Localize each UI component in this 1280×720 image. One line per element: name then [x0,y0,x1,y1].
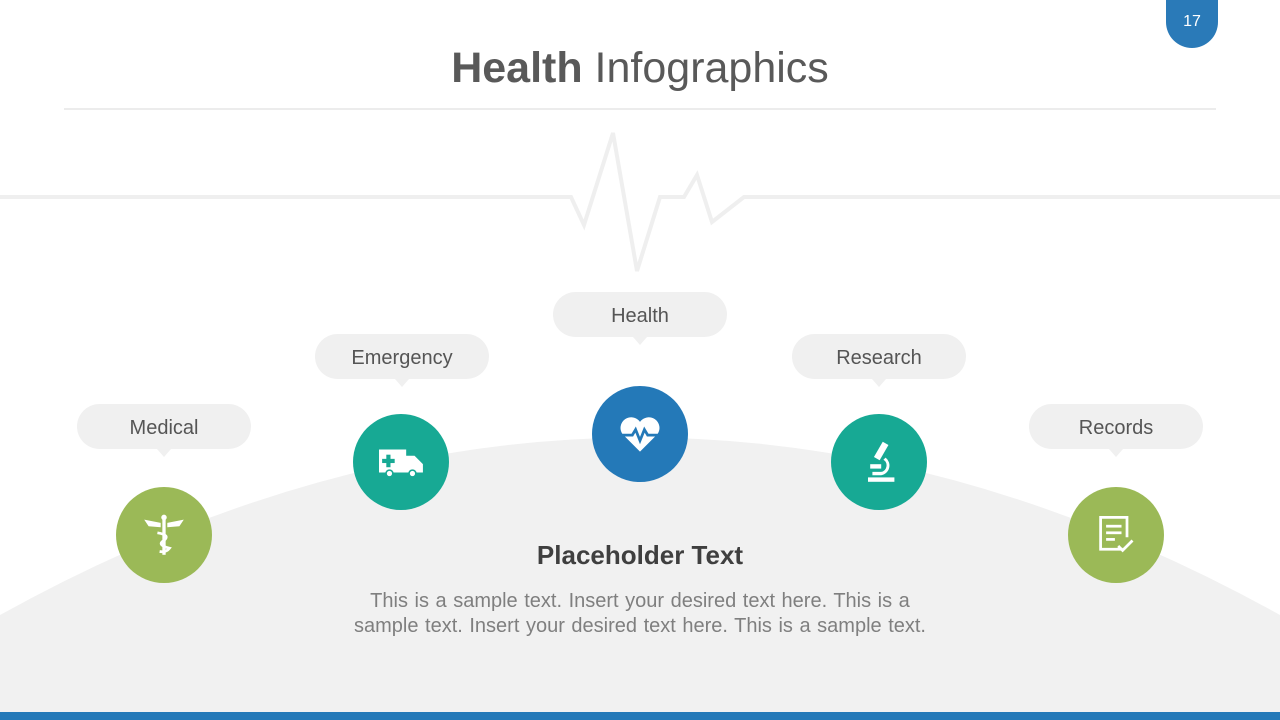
bubble: Health: Health [611,305,669,327]
page number badge [1166,0,1218,48]
text block body: This is a sample text. Insert your desired text here. This is a sample text. Insert your desired text here. This is a sample text. [354,590,926,637]
bubble: Research: Research [836,347,922,369]
bubble: Medical: Medical [130,417,198,439]
icon: heart pulse [592,386,688,482]
bubble: Health [553,292,727,337]
icon: records checklist [1068,487,1164,583]
bubble: Records [1029,404,1203,449]
icon: ambulance [353,414,449,510]
bubble: Emergency [315,334,489,379]
bubble: Emergency: Emergency [351,347,453,369]
icon: medical caduceus [116,487,212,583]
bottom bar [0,712,1280,720]
title: Health Infographics [451,44,829,92]
bubble: Medical [77,404,251,449]
icon: microscope [831,414,927,510]
bubble: Research [792,334,966,379]
page number badge: 17 [1183,13,1201,30]
text block heading: Placeholder Text [537,540,743,570]
bubble: Records: Records [1079,417,1153,439]
